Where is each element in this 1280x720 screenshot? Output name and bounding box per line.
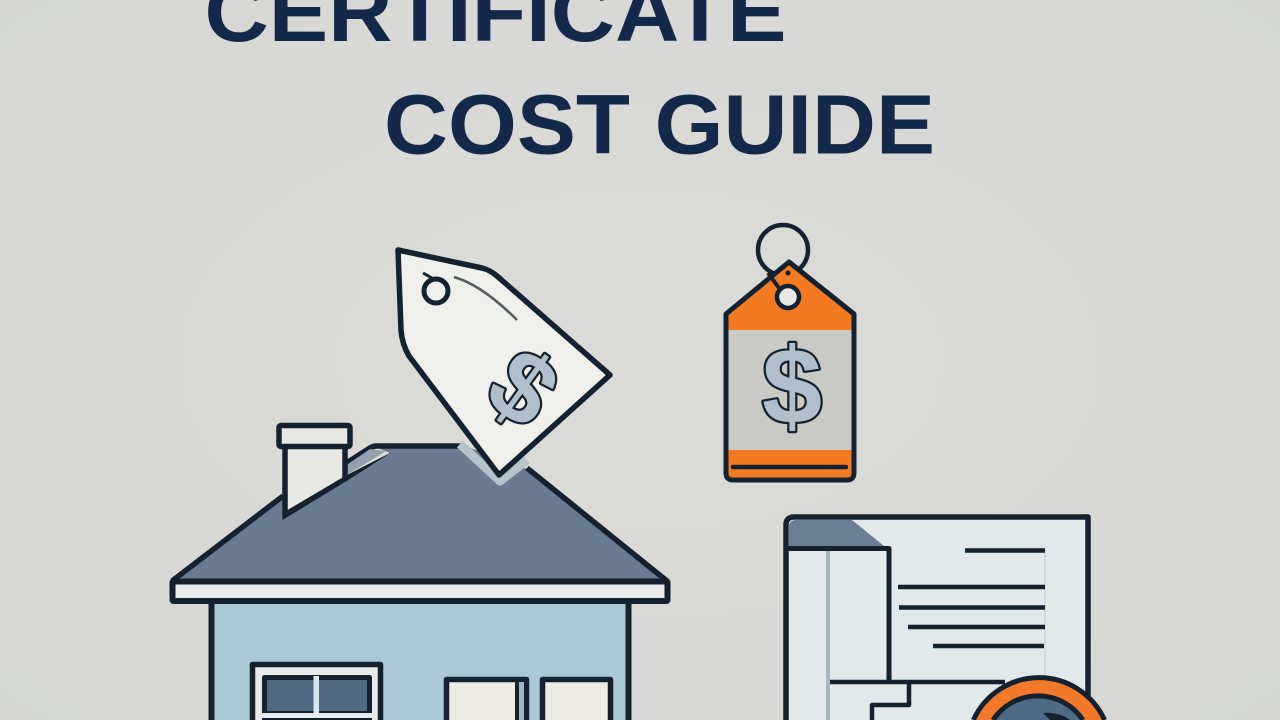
tag body [726,262,854,480]
seal badge [973,678,1105,720]
tag ring [758,225,808,275]
lower fold lines [830,682,1005,720]
document sheet [786,517,1088,720]
tag hole [423,273,448,303]
icon: house [172,426,668,720]
chimney [279,426,392,520]
window [252,664,380,720]
tag body [398,250,610,475]
roof [172,446,667,581]
door panels [446,680,610,720]
tag crease [454,277,517,320]
icon: upright price tag [726,225,854,480]
tag hole [768,270,799,308]
dollar sign: $ [468,326,578,450]
title: COST GUIDE [384,78,935,172]
icon: certificate document [786,517,1105,720]
icon: tilted price tag [398,250,610,481]
eave [172,582,668,601]
title [204,0,935,172]
house wall [212,600,629,720]
document fold [786,520,1045,720]
dollar sign: $ [762,325,822,446]
text lines [898,550,1045,646]
tag shadow [460,444,527,481]
